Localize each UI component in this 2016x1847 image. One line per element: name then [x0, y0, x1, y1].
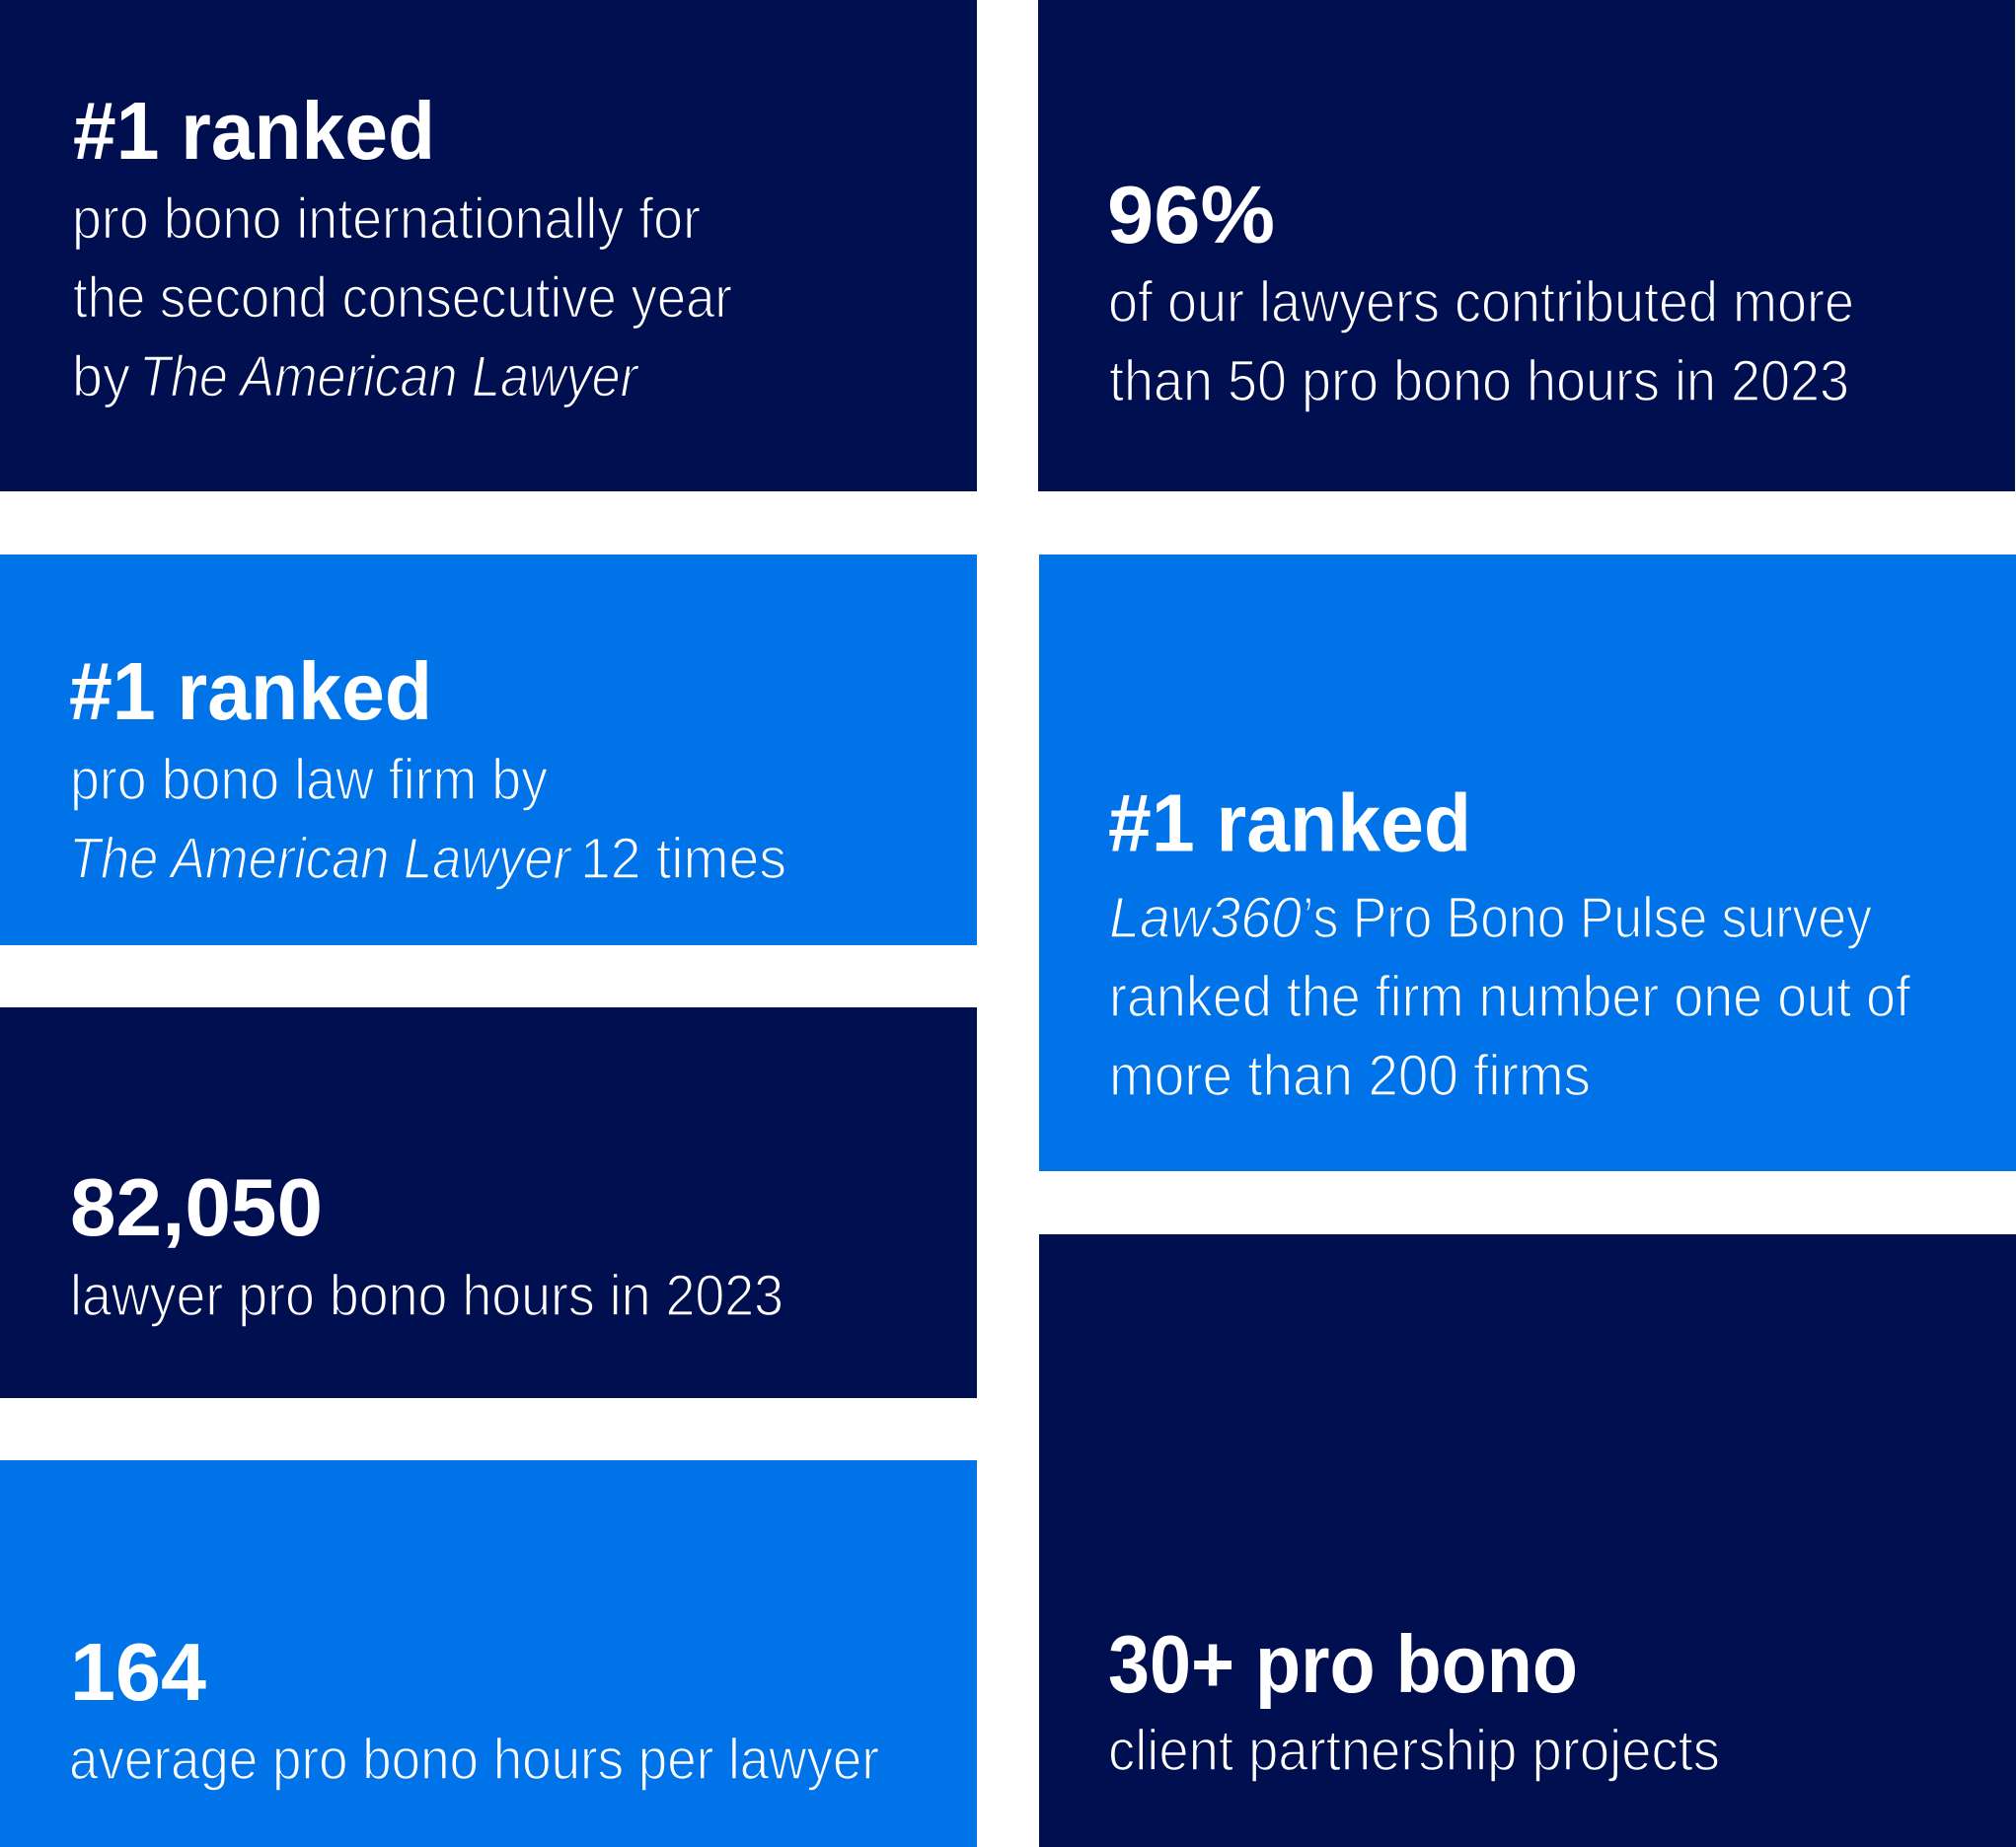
- heading: 82,050: 82,050: [70, 1161, 323, 1253]
- heading: #1 ranked: #1 ranked: [73, 85, 435, 177]
- panel: #1 ranked internationally: [0, 0, 977, 491]
- text block: lawyers contributed: than 50 pro bono hours in 2023: [1109, 349, 1849, 413]
- text block: lawyers contributed: of our lawyers contributed more: [1108, 270, 1854, 334]
- text block: lawyer pro bono hours: lawyer pro bono hours in 2023: [70, 1264, 784, 1328]
- text block: pro bono law firm: pro bono law firm by: [70, 748, 548, 812]
- heading: #1 ranked: #1 ranked: [69, 645, 432, 737]
- panel: #1 ranked Law360: [1039, 554, 2016, 1171]
- text block: pro bono internationally: [72, 187, 732, 408]
- text block: Law360 survey: Law360: [1109, 886, 1302, 950]
- text block: client partnership: client partnership projects: [1108, 1719, 1720, 1783]
- text block: pro bono law firm: [69, 748, 786, 891]
- panel: 82,050 hours: [0, 1007, 977, 1398]
- text block: pro bono law firm: The American Lawyer: [69, 827, 572, 891]
- text block: Law360 survey: [1109, 886, 1911, 1108]
- panel: #1 ranked law firm: [0, 554, 977, 945]
- heading: 30+ pro bono: 30+ pro bono: [1108, 1618, 1578, 1710]
- panel: 96% of lawyers: [1038, 0, 2015, 491]
- heading: #1 ranked: #1 ranked: [1108, 777, 1471, 868]
- text block: average hours: average pro bono hours per lawyer: [69, 1728, 879, 1792]
- text block: pro bono internationally: The American Lawyer: [139, 345, 639, 408]
- text block: lawyers contributed: [1108, 270, 1854, 413]
- text block: Law360 survey: more than 200 firms: [1109, 1044, 1591, 1108]
- text block: Law360 survey: ’s Pro Bono Pulse survey: [1303, 886, 1872, 950]
- panel: 30+ pro bono: [1039, 1234, 2016, 1847]
- text block: pro bono internationally: by: [72, 345, 130, 408]
- panel: 164 average: [0, 1460, 977, 1847]
- heading: 96%: 96%: [1107, 169, 1275, 260]
- text block: Law360 survey: ranked the firm number one out of: [1109, 965, 1911, 1029]
- text block: pro bono internationally: the second consecutive year: [73, 266, 732, 330]
- text block: pro bono internationally: pro bono internationally for: [72, 187, 701, 251]
- text block: pro bono law firm: 12 times: [580, 827, 786, 891]
- heading: 164: 164: [70, 1626, 206, 1718]
